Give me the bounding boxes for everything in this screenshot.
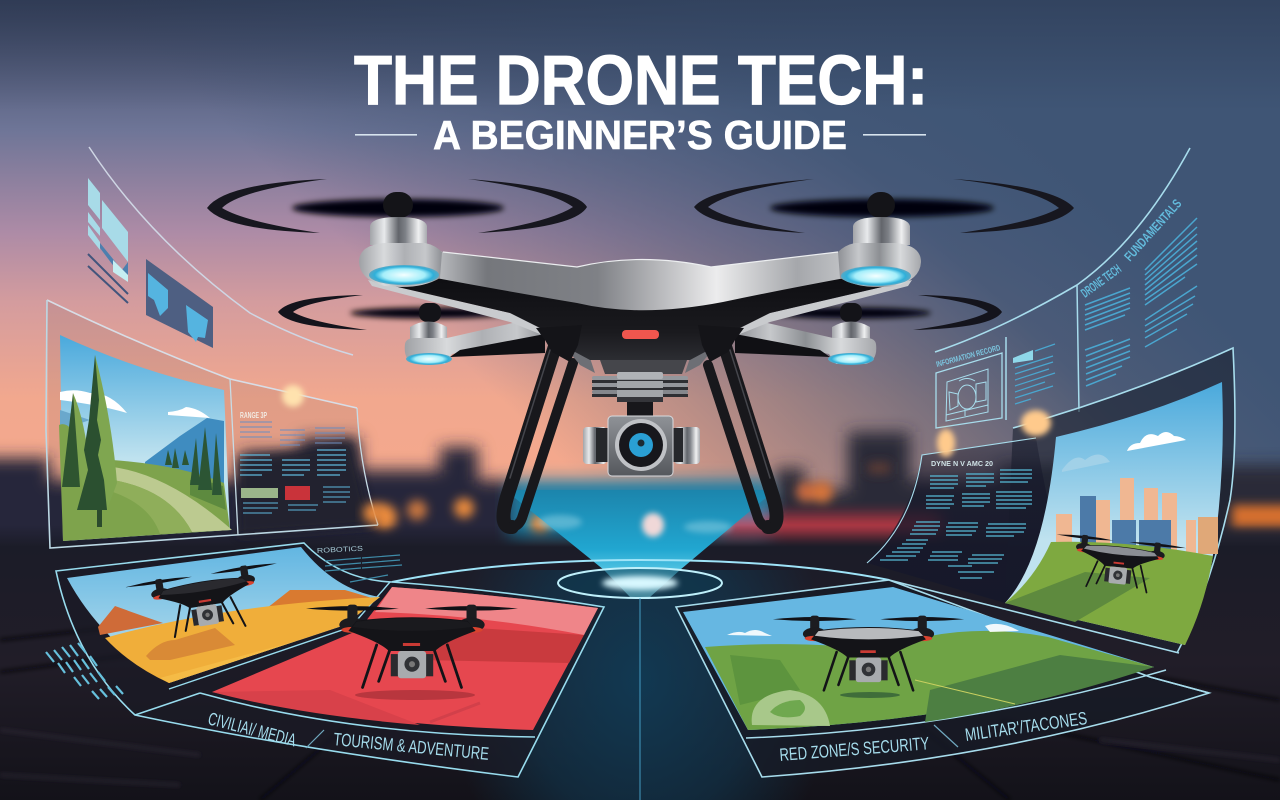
front left motor pod	[359, 192, 442, 287]
subtitle rule right	[863, 134, 926, 136]
projection beam	[505, 490, 775, 597]
camera	[583, 416, 700, 476]
front left rotor	[207, 179, 587, 233]
landscape image	[59, 335, 232, 541]
text lines: info column two	[1145, 218, 1197, 347]
leg shoulders	[536, 325, 744, 362]
rear right arm and motor	[735, 303, 876, 365]
heading: small panel strip: INFORMATION RECORD	[935, 343, 1001, 369]
label: red zone security: RED ZONE/S SECURITY	[779, 733, 930, 765]
body: silver top shell	[427, 245, 853, 310]
front right motor pod	[838, 192, 921, 287]
yellow desert image	[67, 547, 380, 683]
small text: card caption: ROBOTICS	[317, 546, 363, 555]
panel: security and military card	[676, 580, 1209, 777]
panel: left landscape screen	[46, 300, 383, 548]
text column: left screen: RANGE 3P	[240, 411, 267, 420]
body: black underside	[372, 268, 908, 360]
ground target rings	[392, 560, 889, 800]
city image	[1005, 382, 1223, 645]
blurred city skyline	[0, 432, 1280, 560]
soft light flares right	[937, 410, 1051, 457]
text column: left screen	[240, 411, 350, 513]
document: printed text sheet: DYNE N V AMC 20	[931, 459, 993, 468]
shell highlight	[443, 252, 838, 267]
panel: right city screen	[867, 348, 1235, 653]
subtitle: A BEGINNER’S GUIDE	[433, 112, 847, 158]
front right rotor	[694, 179, 1074, 233]
tick marks lower left	[46, 643, 123, 699]
soft light flare left	[282, 385, 304, 407]
landing legs	[503, 337, 777, 527]
heading: curved info heading	[1078, 196, 1185, 300]
panel: upper left thumbnails	[88, 147, 353, 355]
label: tourism and adventure: TOURISM & ADVENTURE	[333, 729, 490, 764]
thumbnail: dark silhouettes	[146, 259, 213, 348]
background: dusk sky	[0, 0, 1280, 560]
label divider slash	[306, 730, 324, 748]
small text: card caption	[317, 546, 402, 582]
gimbal mount	[592, 360, 688, 419]
heading: curved info heading: DRONE TECH	[1078, 261, 1124, 300]
soft orange glow	[363, 503, 383, 523]
thumbnail: light blue map	[88, 178, 128, 303]
panel: upper right info screens	[935, 148, 1197, 428]
title: THE DRONE TECH:	[354, 41, 928, 119]
status light	[622, 330, 659, 339]
text lines: info column one	[1085, 288, 1130, 386]
subtitle rule left	[355, 134, 417, 136]
red desert image	[212, 587, 598, 730]
rear left rotor	[278, 295, 510, 330]
card frame	[676, 580, 1209, 777]
rear left arm and motor	[405, 303, 545, 365]
document: printed text sheet	[867, 438, 1060, 603]
green landscape image	[683, 587, 1154, 730]
heading: curved info heading: FUNDAMENTALS	[1121, 196, 1185, 264]
icon: drone schematic	[946, 369, 988, 421]
label divider slash	[934, 725, 958, 747]
card frame	[56, 543, 604, 777]
rear right rotor	[771, 295, 1002, 330]
small text block	[1013, 344, 1055, 404]
body: silver lower strips	[368, 280, 912, 334]
side struts	[566, 346, 714, 373]
label: civilian media: CIVILIAI/ MEDIA	[206, 709, 298, 750]
drone: main quadcopter	[207, 179, 1074, 527]
label: military tacones: MILITAR'/TACONES	[964, 708, 1088, 745]
panel: civilian media and tourism cards	[46, 543, 604, 777]
wooden floor	[0, 525, 1280, 800]
